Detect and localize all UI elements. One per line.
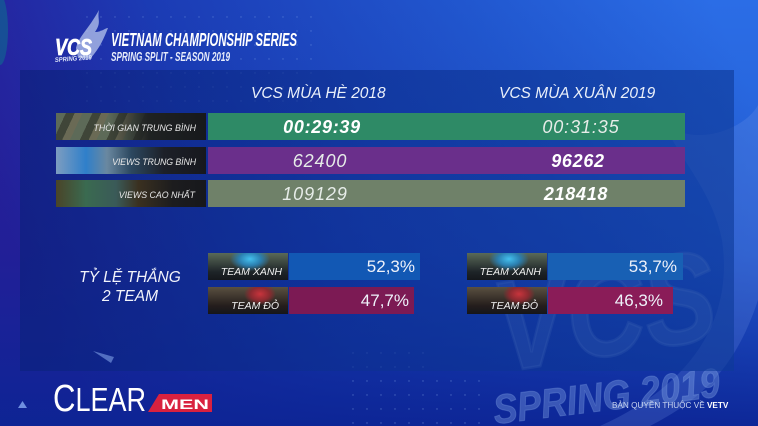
thumbnail: TEAM ĐỎ	[231, 300, 279, 312]
value 2018: 00:29:39	[283, 117, 361, 137]
value 2019: 00:31:35	[542, 117, 620, 137]
thumbnail: TEAM XANH	[221, 266, 282, 278]
row: Views trung bình	[56, 147, 685, 174]
thumbnail label: THỜI GIAN TRUNG BÌNH	[94, 123, 196, 133]
title: Vietnam Championship Series: SPRING SPLIT - SEASON 2019	[111, 50, 230, 64]
decorative shard	[93, 351, 114, 363]
watermark: VCS Spring 2019: VCS	[484, 224, 726, 400]
thumbnail	[208, 253, 288, 280]
sponsor logo: Clear Men: MEN	[161, 397, 209, 412]
2019 team red	[467, 287, 673, 314]
percent: 52,3%	[367, 257, 415, 276]
thumbnail	[467, 287, 547, 314]
sponsor logo: Clear Men	[53, 382, 212, 414]
value 2019: 96262	[551, 151, 605, 171]
thumbnail	[208, 287, 288, 314]
percent: 47,7%	[361, 291, 409, 310]
value 2018: 109129	[282, 184, 348, 204]
2018 team red	[208, 287, 414, 314]
percent: 46,3%	[615, 291, 663, 310]
column heading: VCS Mùa Hè 2018: VCS MÙA HÈ 2018	[251, 85, 386, 102]
copyright: BẢN QUYỀN THUỘC VỀ VETV	[612, 401, 728, 410]
thumbnail label: VIEWS TRUNG BÌNH	[112, 157, 196, 167]
icon: small triangle	[18, 401, 27, 408]
thumbnail label	[56, 113, 206, 140]
row: Views cao nhất	[56, 180, 685, 207]
thumbnail label	[56, 147, 206, 174]
main panel	[20, 70, 734, 371]
thumbnail label: VIEWS CAO NHẤT	[119, 190, 195, 200]
column heading: VCS Mùa Xuân 2019: VCS MÙA XUÂN 2019	[499, 85, 655, 102]
value 2019: 218418	[544, 184, 608, 204]
bar	[548, 253, 683, 280]
heading: Tỷ lệ thắng 2 team	[79, 268, 181, 305]
2018 team blue	[208, 253, 420, 280]
logo: VCS Spring 2019: SPRING 2019	[55, 54, 92, 64]
row: Thời gian trung bình	[56, 113, 685, 140]
heading: Tỷ lệ thắng 2 team: TỶ LỆ THẮNG	[79, 269, 181, 286]
value 2018: 62400	[293, 151, 347, 171]
bar	[289, 253, 420, 280]
value bar	[208, 113, 685, 140]
bar	[289, 287, 414, 314]
thumbnail: TEAM ĐỎ	[490, 300, 538, 312]
bar	[548, 287, 673, 314]
heading: Tỷ lệ thắng 2 team: 2 TEAM	[102, 288, 158, 305]
2019 team blue	[467, 253, 683, 280]
title: Vietnam Championship Series	[111, 30, 297, 64]
logo: VCS Spring 2019	[55, 10, 108, 64]
thumbnail label	[56, 180, 206, 207]
value bar	[208, 180, 685, 207]
percent: 53,7%	[629, 257, 677, 276]
value bar	[208, 147, 685, 174]
thumbnail	[467, 253, 547, 280]
logo: VCS Spring 2019: VCS	[55, 34, 93, 60]
thumbnail: TEAM XANH	[480, 266, 541, 278]
